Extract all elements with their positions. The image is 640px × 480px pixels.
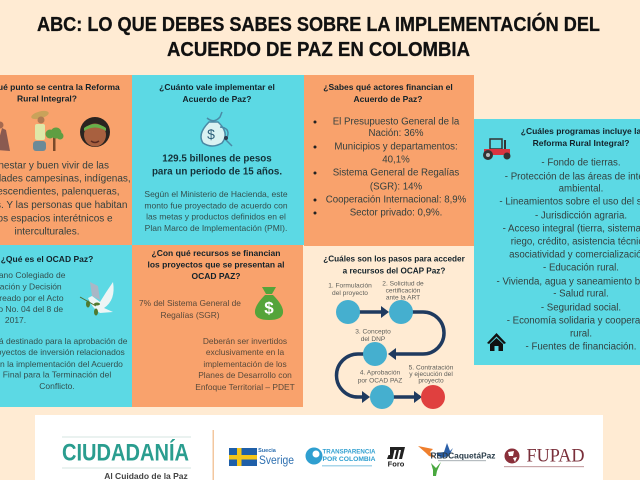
heading: actores [323, 82, 453, 104]
heading: programas [521, 126, 640, 148]
panel: ocad paz [0, 245, 132, 407]
text: ministerio de hacienda: Según el Ministerio de Hacienda, este [144, 189, 288, 199]
heading: recursos: los proyectos que se presentan al [148, 260, 284, 270]
flow diagram: por OCAD PAZ [358, 378, 402, 384]
text: ocad purpose: Conflicto. [39, 381, 75, 391]
flow diagram: 4. Aprobación [360, 370, 400, 376]
flow diagram: del DNP [361, 336, 386, 343]
heading: ocad paz: ¿Qué es el OCAD Paz? [1, 254, 93, 264]
flow diagram: 2. Solicitud de [382, 280, 424, 288]
list: programs: - Jurisdicción agraria. [535, 210, 627, 222]
panel: actores que financian [304, 75, 474, 246]
list: programs: - Salud rural. [553, 288, 609, 300]
heading: cuanto vale: ¿Cuánto vale implementar el [159, 82, 275, 92]
flow diagram [328, 280, 454, 409]
panel: programas reforma rural [474, 119, 640, 365]
text: ministerio de hacienda: las metas y productos definidos en el [146, 212, 286, 222]
text: pdet: exclusivamente en la [206, 347, 284, 357]
list: funding sources: Sector privado: 0,9%. [350, 208, 442, 218]
logo: ciudadania: CIUDADANÍA [62, 438, 189, 466]
list: funding sources: El Presupuesto General de la [333, 116, 460, 128]
logo: foro: Foro [388, 460, 405, 468]
heading: actores: Acuerdo de Paz? [354, 94, 422, 104]
panel: footer logos [35, 415, 603, 480]
icon: tractor [483, 139, 510, 160]
text: ocad definition: 2017. [5, 315, 26, 325]
text: ministerio de hacienda: Plan Marco de Implementación (PMI). [145, 223, 287, 233]
text: ministerio de hacienda: monto fue proyectado de acuerdo con [144, 200, 288, 210]
text: sgr percent: 7% del Sistema General de [139, 298, 241, 308]
heading: pasos: ¿Cuáles son los pasos para acceder [323, 254, 466, 264]
flow diagram: 5. Contratación [409, 364, 454, 372]
list: funding sources: Municipios y departamentos: [334, 142, 458, 152]
text: pdet: Planes de Desarrollo con [198, 370, 292, 380]
list: funding sources: (SGR): 14% [370, 182, 422, 192]
amount: 129.5 billones de pesos [162, 154, 272, 164]
list: funding sources: 40,1% [382, 154, 410, 166]
heading: recursos [148, 248, 284, 281]
heading: recursos: ¿Con qué recursos se financian [152, 248, 280, 258]
list: funding sources: Sistema General de Regalías [333, 168, 459, 178]
text: pdet: implementación de los [203, 359, 287, 369]
flow diagram: 3. Concepto [355, 328, 391, 336]
logo: sverige: Sverige [259, 455, 294, 467]
title: ABC: LO QUE DEBES SABES SOBRE LA IMPLEMENTACIÓN DEL [37, 12, 600, 36]
panel: reforma rural integral [0, 75, 132, 245]
list: funding sources: Cooperación Internacional: 8,9% [326, 194, 467, 206]
heading: pasos [323, 254, 466, 276]
icon: green money bag: $ [264, 298, 274, 318]
icon: dove [80, 282, 114, 316]
panel: recursos [132, 245, 303, 407]
icon: money bag outline: $ [207, 126, 215, 142]
list: programs: ambiental. [559, 184, 603, 194]
list: programs: - Seguridad social. [541, 302, 621, 314]
flow diagram: del proyecto [332, 290, 368, 297]
title: ACUERDO DE PAZ EN COLOMBIA [167, 39, 470, 61]
heading: cuanto vale: Acuerdo de Paz? [183, 94, 251, 104]
icon: house [487, 333, 506, 351]
text: ministerio de hacienda [144, 189, 288, 233]
logo: red caqueta paz: REDCaquetáPaz [430, 452, 496, 460]
text: pdet [195, 336, 295, 392]
logo: transparencia por colombia [306, 448, 376, 466]
panel: cuanto vale [132, 75, 304, 245]
logo: fupad [504, 446, 584, 467]
heading: recursos: OCAD PAZ? [192, 271, 240, 281]
amount: para un periodo de 15 años. [152, 166, 282, 178]
flow diagram: ante la ART [386, 294, 420, 302]
text: sgr percent: Regalías (SGR) [160, 310, 220, 320]
logo: ciudadania [62, 437, 191, 480]
icon: green money bag [255, 287, 283, 320]
text: ocad definition [0, 270, 66, 325]
text: sgr percent [139, 298, 241, 320]
text: ocad purpose [0, 336, 128, 391]
list: programs: - Fuentes de financiación. [526, 342, 636, 352]
flow diagram: y ejecución del [409, 371, 453, 378]
list: programs: - Educación rural. [543, 262, 619, 274]
heading: actores: ¿Sabes qué actores financian el [323, 82, 453, 92]
logo: sverige: Suecia [258, 448, 277, 454]
list: funding sources: Nación: 36% [369, 128, 424, 139]
heading: pasos: a recursos del OCAP Paz? [343, 266, 445, 276]
logo: transparencia por colombia: POR COLOMBIA [322, 456, 376, 463]
flow diagram: certificación [386, 288, 421, 294]
text: pdet: Enfoque Territorial – PDET [195, 382, 295, 392]
logo: transparencia por colombia: TRANSPARENCIA [322, 448, 376, 456]
text: ocad purpose: Final para la Terminación del [3, 370, 111, 380]
heading: programas: Reforma Rural Integral? [533, 138, 629, 148]
logo: red caqueta paz [418, 443, 496, 476]
panel: pasos ocad [323, 254, 466, 409]
heading: reforma rural: Rural Integral? [17, 94, 77, 104]
title [37, 12, 600, 61]
flow diagram: proyecto [418, 378, 444, 384]
list: programs: - Fondo de tierras. [541, 158, 621, 168]
text: reforma rural description [0, 160, 131, 238]
list: funding sources [314, 116, 467, 218]
logo: fupad: FUPAD [526, 446, 584, 466]
list: programs [497, 158, 640, 352]
icon: rural people [0, 109, 110, 151]
flow diagram: 1. Formulación [328, 282, 372, 290]
amount [152, 154, 282, 178]
icon: money bag outline [201, 112, 232, 146]
heading: programas: ¿Cuáles programas incluye la [521, 126, 640, 136]
logo: foro [387, 447, 405, 468]
list: programs: rural. [570, 328, 592, 340]
heading: cuanto vale [159, 82, 275, 104]
text: reforma rural description: interculturales. [14, 226, 80, 238]
text: pdet: Deberán ser invertidos [203, 336, 287, 346]
heading: reforma rural [0, 82, 120, 104]
logo: sverige [229, 448, 294, 467]
